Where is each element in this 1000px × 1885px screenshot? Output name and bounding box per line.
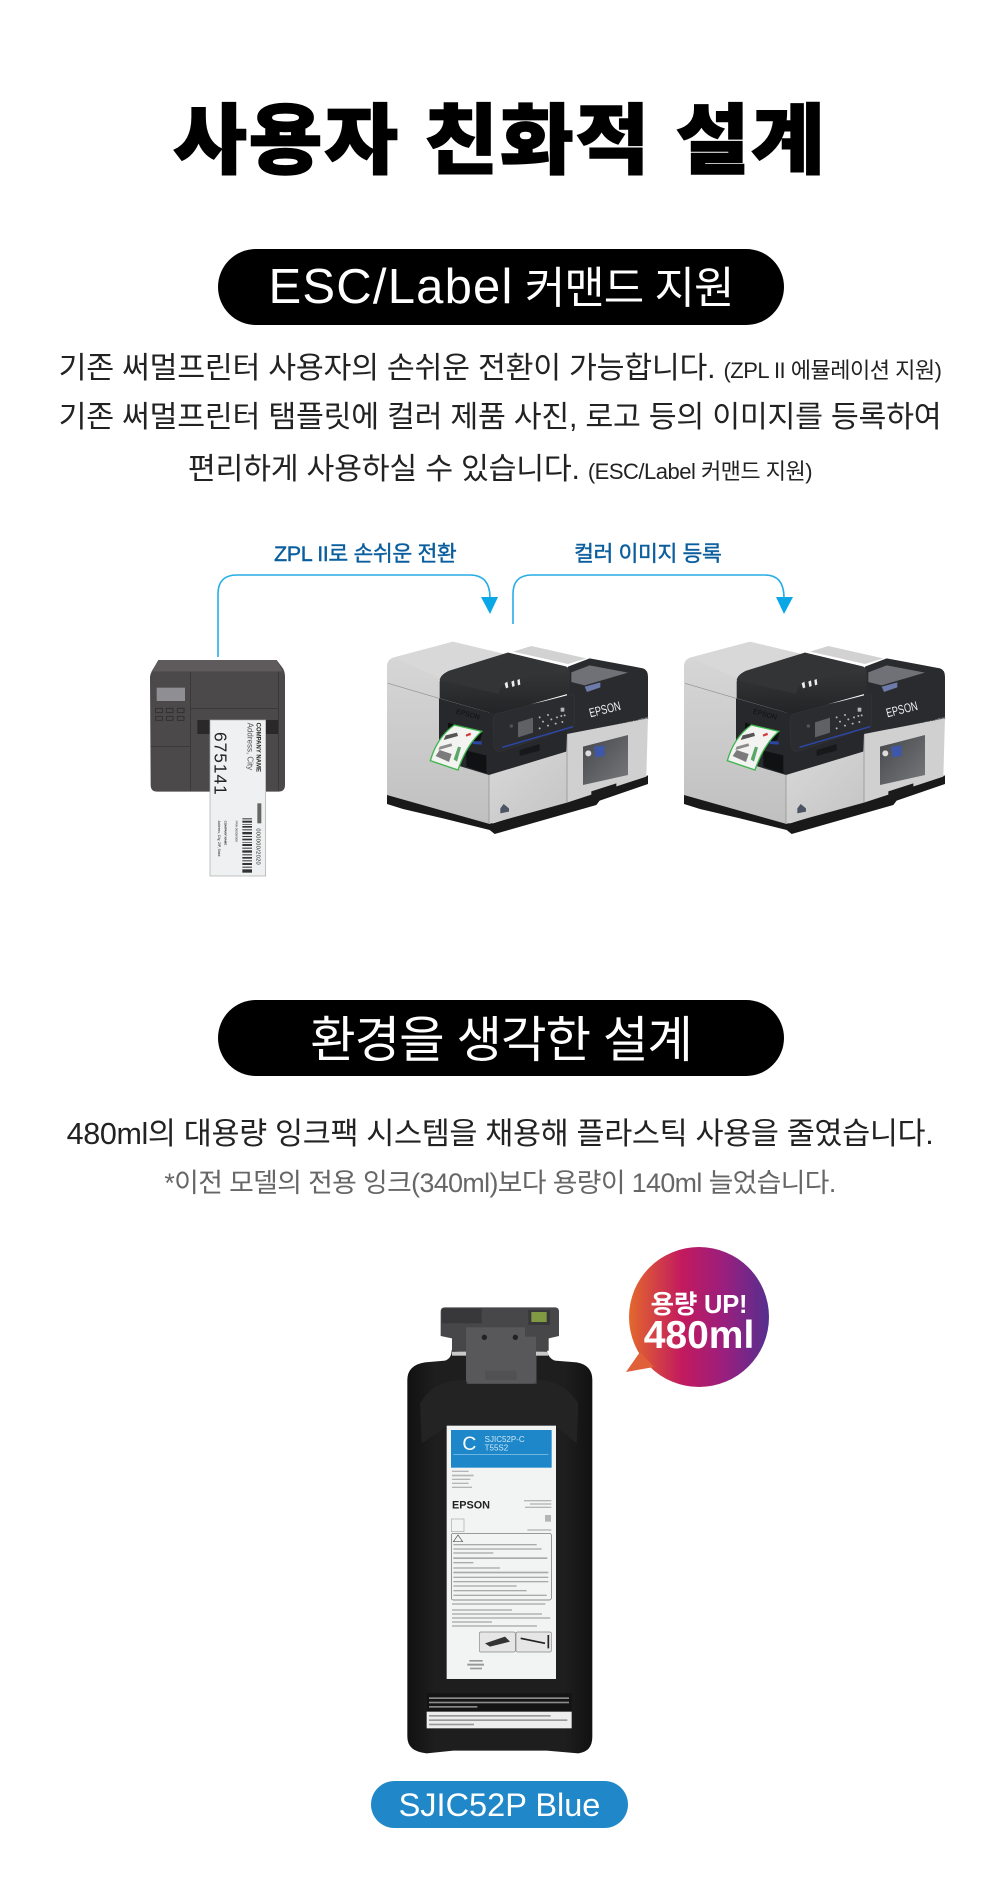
title: 사용자 친화적 설계 [173,79,827,191]
heading pill: ESC/Label command: ESC/Label 커맨드 지원 [269,260,733,314]
illustration: colour label printer 1: EPSON [588,699,622,720]
illustration: thermal printer with label: 000000/2020 [255,828,261,865]
callout: capacity up bubble [626,1247,769,1387]
illustration: colour label printer 1 [387,642,649,834]
heading pill: environmental design: 환경을 생각한 설계 [310,1013,692,1068]
arrow: colour printer to colour printer [512,574,793,624]
label: ZPL II transition: ZPL II로 손쉬운 전환 [274,541,456,566]
illustration: thermal printer with label: COMPANY NAME [224,821,228,845]
product pill: SJIC52P Blue [371,1781,628,1828]
illustration: colour label printer 2 [684,642,946,834]
illustration: thermal printer with label: COMPANY NAME [255,723,261,772]
heading pill: environmental design [218,1000,784,1076]
illustration: colour label printer 1: EPSON [455,709,481,722]
text line: ZPL II migration: 기존 써멀프린터 사용자의 손쉬운 전환이 가능합니다. (ZPL II 에뮬레이션 지원) [59,352,941,385]
illustration: ink pack: EPSON [452,1500,490,1512]
illustration: thermal printer with label: Address, City [245,723,254,770]
illustration: thermal printer with label: PRN 00000/000 [234,821,238,842]
text line: convenience: 편리하게 사용하실 수 있습니다. (ESC/Label 커맨드 지원) [188,453,812,486]
illustration: colour label printer 2: ColorWorks C8040 [915,716,946,728]
illustration: thermal printer with label: Address, City, ZIP, State [217,821,221,857]
label: colour image registration: 컬러 이미지 등록 [574,541,721,566]
illustration: thermal printer with label: 675141 [211,732,231,796]
arrow: thermal printer to colour printer [217,574,498,657]
illustration: ink pack: SJIC52P-C [485,1435,525,1444]
text block: capacity footnote: *이전 모델의 전용 잉크(340ml)보다 용량이 140ml 늘었습니다. [164,1168,836,1198]
text block: ink pack description: 480ml의 대용량 잉크팩 시스템을 채용해 플라스틱 사용을 줄였습니다. [67,1117,933,1151]
text line: template registration: 기존 써멀프린터 탬플릿에 컬러 제품 사진, 로고 등의 이미지를 등록하여 [59,401,941,434]
illustration: ink pack: C [462,1434,476,1455]
callout text: 480ml: 480ml [644,1314,754,1357]
illustration: ink pack: T55S2 [485,1444,509,1453]
product pill: SJIC52P Blue: SJIC52P Blue [399,1787,600,1823]
illustration: colour label printer 2: EPSON [885,699,919,720]
heading pill: ESC/Label command [218,249,784,325]
illustration: colour label printer 1: ColorWorks C8040 [618,716,649,728]
callout text: 용량 UP!: 용량 UP! [651,1291,747,1319]
illustration: colour label printer 2: EPSON [752,709,778,722]
illustration: thermal printer with label [150,660,285,876]
